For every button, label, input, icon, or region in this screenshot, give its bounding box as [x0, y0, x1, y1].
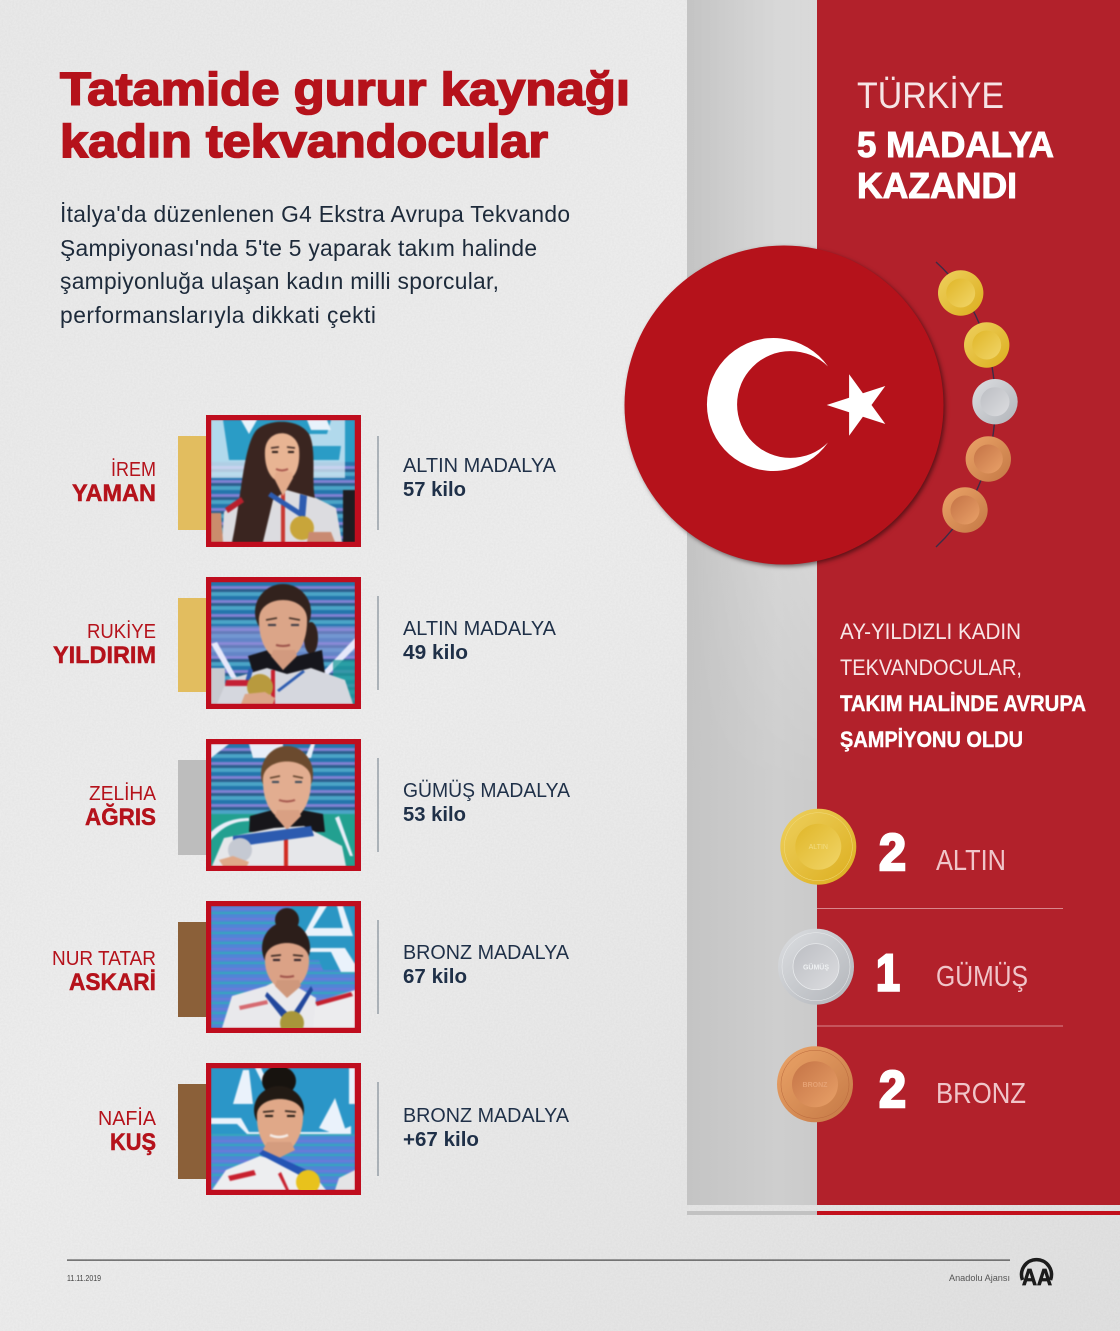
athlete row: Nur Tatar Askari: [52, 901, 569, 1035]
athlete row: Zeliha Ağrıs: AĞRIS: [85, 803, 156, 831]
heading: Türkiye 5 madalya kazandı: 5 MADALYA: [857, 124, 1054, 165]
footer: [67, 1260, 1052, 1290]
intro text block: şampiyonluğa ulaşan kadın milli sporcular,: [60, 268, 499, 294]
intro text block: [60, 201, 570, 328]
footer: Anadolu Ajansı: [949, 1273, 1010, 1283]
medal tally: gold: ALTIN: [809, 844, 828, 851]
medal tally: bronze: 2: [879, 1061, 906, 1119]
medal tally: gold: [780, 809, 1006, 885]
icon: Anadolu Agency logo: AA: [1022, 1264, 1052, 1290]
medal tally: gold: 2: [879, 824, 906, 882]
athlete row: Rukiye Yıldırım: [53, 577, 556, 709]
medal tally: bronze: BRONZ: [936, 1078, 1026, 1110]
text block: team champion: TEKVANDOCULAR,: [840, 655, 1022, 680]
athlete row: Zeliha Ağrıs: 53 kilo: [403, 803, 466, 826]
athlete row: Nafia Kuş: NAFİA: [98, 1107, 157, 1130]
heading: Türkiye 5 madalya kazandı: KAZANDI: [857, 165, 1017, 206]
athlete row: Nafia Kuş: BRONZ MADALYA: [403, 1104, 569, 1127]
athlete row: Nafia Kuş: [98, 1063, 569, 1195]
athlete row: Nur Tatar Askari: BRONZ MADALYA: [403, 941, 569, 964]
athlete row: Nur Tatar Askari: 67 kilo: [403, 965, 467, 988]
medal tally: gold: ALTIN: [936, 845, 1006, 877]
athlete row: Zeliha Ağrıs: [85, 739, 570, 871]
athlete row: Rukiye Yıldırım: YILDIRIM: [53, 642, 156, 669]
medal string arc: [936, 262, 995, 547]
athlete row: Zeliha Ağrıs: ZELİHA: [89, 782, 157, 805]
intro text block: İtalya'da düzenlenen G4 Ekstra Avrupa Tekvando: [60, 201, 570, 227]
athlete row: İrem Yaman: ALTIN MADALYA: [403, 454, 556, 477]
text block: team champion: TAKIM HALİNDE AVRUPA: [840, 691, 1086, 716]
medal tally: silver: 1: [876, 944, 900, 1002]
text block: team champion: ŞAMPİYONU OLDU: [840, 727, 1023, 752]
medal tally: silver: GÜMÜŞ: [936, 961, 1028, 993]
athlete row: İrem Yaman: İREM: [111, 458, 156, 481]
divider: [817, 1026, 1063, 1027]
text block: team champion: [840, 619, 1086, 752]
medal tally: bronze: BRONZ: [803, 1082, 828, 1089]
medal tally: bronze: [777, 1046, 1026, 1122]
small medals column: [938, 270, 1018, 533]
athlete row: Nafia Kuş: +67 kilo: [403, 1128, 479, 1151]
panel: red side panel: [817, 0, 1120, 1215]
title: [60, 63, 630, 167]
grey vertical band: [687, 0, 817, 1215]
athlete row: İrem Yaman: 57 kilo: [403, 478, 466, 501]
title: Tatamide gurur kaynağı: [60, 63, 630, 115]
title: kadın tekvandocular: [60, 115, 548, 167]
athlete row: Nafia Kuş: KUŞ: [110, 1129, 156, 1156]
medal tally: silver: GÜMÜŞ: [803, 962, 829, 972]
athlete row: Rukiye Yıldırım: RUKİYE: [87, 620, 156, 643]
icon: Turkish flag circle: [624, 246, 944, 564]
athlete row: Nur Tatar Askari: ASKARİ: [69, 969, 156, 996]
athlete row: Rukiye Yıldırım: 49 kilo: [403, 641, 468, 664]
heading: Türkiye 5 madalya kazandı: TÜRKİYE: [857, 75, 1004, 116]
medal tally: silver: [778, 929, 1028, 1005]
athlete row: İrem Yaman: YAMAN: [72, 480, 156, 507]
athlete row: Rukiye Yıldırım: ALTIN MADALYA: [403, 617, 556, 640]
athlete row: Zeliha Ağrıs: GÜMÜŞ MADALYA: [403, 779, 570, 802]
athlete row: Nur Tatar Askari: NUR TATAR: [52, 948, 156, 970]
footer: 11.11.2019: [67, 1273, 101, 1283]
text block: team champion: AY-YILDIZLI KADIN: [840, 619, 1021, 644]
intro text block: performanslarıyla dikkati çekti: [60, 302, 376, 328]
divider: [817, 908, 1063, 909]
athlete row: İrem Yaman: [72, 415, 556, 547]
heading: Türkiye 5 madalya kazandı: [857, 75, 1054, 206]
intro text block: Şampiyonası'nda 5'te 5 yaparak takım halinde: [60, 235, 537, 261]
